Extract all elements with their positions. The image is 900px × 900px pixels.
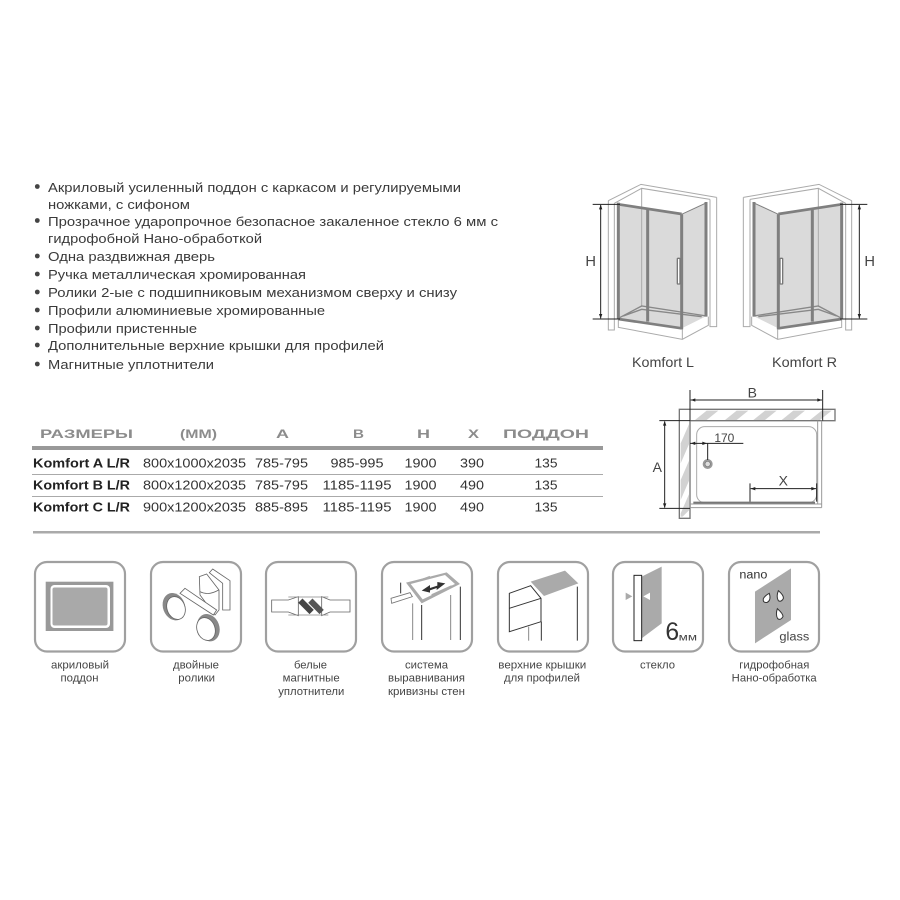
features bullet list: Прозрачное ударопрочное безопасное закаленное стекло 6 мм с (48, 214, 498, 229)
caption: magnetic seals (278, 659, 344, 698)
table row: Komfort A: 785-795 (255, 456, 308, 470)
table row: Komfort C: 900x1200x2035 (143, 500, 246, 514)
table row: Komfort B (33, 478, 558, 492)
label: Komfort R: Komfort R (772, 354, 837, 370)
caption: double rollers (173, 659, 219, 685)
features bullet list: Магнитные уплотнители (48, 357, 214, 372)
caption: magnetic seals: белые (294, 659, 327, 671)
table row: Komfort B: Komfort B L/R (33, 478, 131, 492)
table header: Н (417, 429, 430, 441)
diagram: plan view with dimensions: 170 (714, 431, 735, 445)
table header: РАЗМЕРЫ (40, 429, 133, 441)
caption: double rollers: двойные (173, 659, 219, 671)
diagram: Komfort R shower (743, 184, 875, 339)
features bullet list: Ролики 2-ые с подшипниковым механизмом сверху и снизу (48, 285, 457, 300)
caption: wall alignment system: система (405, 659, 449, 671)
table row: Komfort B: 135 (534, 478, 558, 492)
caption: nano coating: Нано-обработка (732, 673, 818, 685)
diagram: Komfort R shower: H (864, 254, 875, 270)
caption: wall alignment system: выравнивания (388, 673, 465, 685)
icon: magnetic seals (266, 562, 356, 652)
features bullet list (35, 180, 498, 372)
table header (40, 429, 589, 441)
table header: В (353, 429, 364, 441)
icon: 6 mm glass (613, 562, 703, 652)
table row: Komfort B: 1185-1195 (322, 478, 392, 492)
features bullet list: Профили пристенные (48, 321, 197, 336)
table row: Komfort A (33, 456, 558, 470)
icon: top profile caps (498, 562, 588, 652)
table header: (ММ) (180, 429, 217, 441)
diagram: Komfort L shower (585, 184, 717, 339)
features bullet list: ножками, с сифоном (48, 197, 190, 212)
caption: nano coating: гидрофобная (739, 659, 809, 671)
table: sizes (32, 429, 603, 514)
table row: Komfort B: 1900 (404, 478, 436, 492)
features bullet list: гидрофобной Нано-обработкой (48, 231, 262, 246)
table row: Komfort C: 1185-1195 (322, 500, 392, 514)
icon: double rollers (151, 562, 241, 652)
table row: Komfort A: 1900 (404, 456, 436, 470)
table row: Komfort B: 490 (460, 478, 484, 492)
icon: nano glass coating: glass (779, 630, 809, 644)
diagram: Komfort L shower: H (585, 254, 596, 270)
caption: acrylic tray (51, 659, 109, 685)
caption: glass: стекло (640, 659, 675, 671)
table row: Komfort A: 135 (534, 456, 558, 470)
icon: wall alignment system (382, 562, 472, 652)
diagram: plan view with dimensions: B (748, 385, 757, 401)
table row: Komfort C: Komfort C L/R (33, 500, 131, 514)
icon: acrylic tray (35, 562, 125, 652)
table row: Komfort C: 135 (534, 500, 558, 514)
table row: Komfort C (33, 500, 558, 514)
diagram: plan view with dimensions (653, 385, 835, 518)
icon: nano glass coating: nano (739, 568, 768, 582)
table row: Komfort A: Komfort A L/R (33, 456, 131, 470)
table row: Komfort B: 785-795 (255, 478, 308, 492)
table row: Komfort C: 1900 (404, 500, 436, 514)
caption: top profile caps: для профилей (504, 673, 580, 685)
caption: nano coating (732, 659, 818, 685)
features bullet list: Одна раздвижная дверь (48, 249, 215, 264)
features bullet list: Акриловый усиленный поддон с каркасом и регулируемыми (48, 180, 461, 195)
diagram: plan view with dimensions: A (653, 459, 663, 475)
caption: double rollers: ролики (178, 673, 215, 685)
label: Komfort L: Komfort L (632, 354, 694, 370)
caption: wall alignment system: кривизны стен (388, 686, 465, 698)
icon: 6 mm glass: 6 (665, 619, 679, 646)
table header: А (276, 429, 289, 441)
features bullet list: Ручка металлическая хромированная (48, 267, 306, 282)
caption: acrylic tray: поддон (60, 673, 98, 685)
caption: magnetic seals: магнитные (283, 673, 340, 685)
caption: acrylic tray: акриловый (51, 659, 109, 671)
table row: Komfort A: 800x1000x2035 (143, 456, 246, 470)
caption: magnetic seals: уплотнители (278, 686, 344, 698)
table row: Komfort B: 800x1200x2035 (143, 478, 246, 492)
table row: Komfort A: 390 (460, 456, 484, 470)
table row: Komfort C: 885-895 (255, 500, 308, 514)
features bullet list: Профили алюминиевые хромированные (48, 303, 325, 318)
table row: Komfort C: 490 (460, 500, 484, 514)
table row: Komfort A: 985-995 (330, 456, 384, 470)
caption: wall alignment system (388, 659, 465, 698)
caption: top profile caps (498, 659, 586, 685)
table header: Х (468, 429, 479, 441)
icon: nano glass coating (729, 562, 819, 652)
icon: 6 mm glass: мм (679, 633, 697, 644)
caption: top profile caps: верхние крышки (498, 659, 586, 671)
table header: ПОДДОН (503, 429, 589, 441)
features bullet list: Дополнительные верхние крышки для профилей (48, 338, 384, 353)
diagram: plan view with dimensions: X (779, 473, 789, 489)
